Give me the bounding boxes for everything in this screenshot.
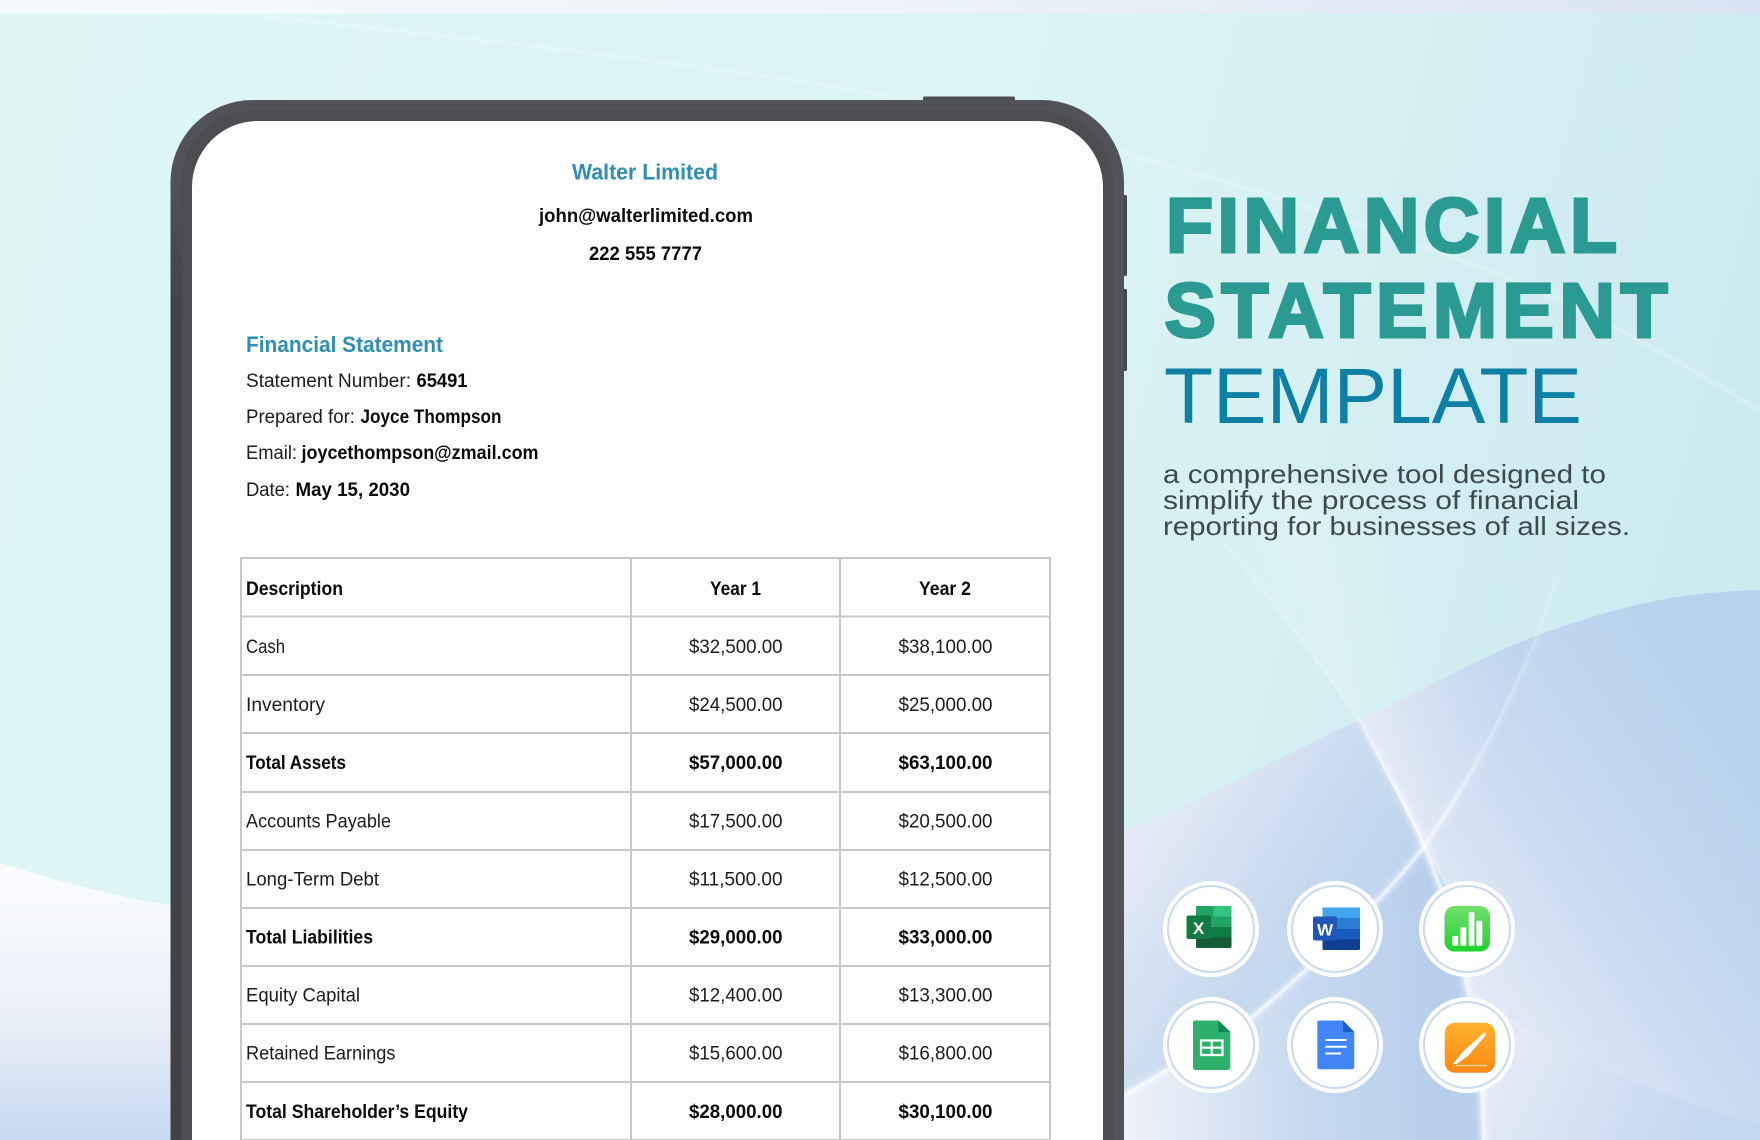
icon: microsoft excel bbox=[1163, 881, 1259, 977]
row: total assets: $57,000.00 bbox=[689, 753, 782, 774]
row: total liabilities: $29,000.00 bbox=[689, 928, 782, 948]
statement details: Joyce Thompson bbox=[360, 407, 502, 428]
row: long-term debt bbox=[246, 870, 992, 890]
company header bbox=[538, 160, 753, 265]
description text bbox=[1163, 459, 1630, 541]
row: total liabilities bbox=[246, 928, 992, 948]
row: inventory: $24,500.00 bbox=[689, 695, 782, 716]
row: cash: $32,500.00 bbox=[689, 637, 782, 658]
statement details: Statement Number: bbox=[246, 371, 411, 392]
row: total shareholder's equity bbox=[246, 1102, 992, 1123]
row: accounts payable bbox=[246, 812, 992, 832]
icon: microsoft word: W bbox=[1317, 920, 1334, 940]
tablet device frame bbox=[170, 96, 1127, 1140]
row: inventory: $25,000.00 bbox=[898, 695, 992, 716]
title bbox=[1164, 183, 1668, 440]
row: inventory: Inventory bbox=[246, 695, 326, 716]
table header row: Year 1 bbox=[710, 579, 761, 600]
table header row: Description bbox=[246, 579, 343, 600]
statement details: 65491 bbox=[416, 371, 468, 392]
statement details bbox=[246, 332, 538, 501]
row: total liabilities: Total Liabilities bbox=[246, 928, 373, 948]
row: total shareholder's equity: Total Shareholder’s Equity bbox=[246, 1102, 468, 1123]
company header: john@walterlimited.com bbox=[538, 206, 753, 227]
row: equity capital: $13,300.00 bbox=[898, 986, 992, 1006]
statement details: Date: bbox=[246, 480, 290, 501]
row: retained earnings bbox=[246, 1044, 992, 1064]
description text: a comprehensive tool designed to bbox=[1163, 459, 1606, 489]
row: total assets: $63,100.00 bbox=[898, 753, 992, 774]
row: retained earnings: $15,600.00 bbox=[689, 1044, 782, 1064]
statement details: Email: bbox=[246, 443, 297, 464]
row: accounts payable: $17,500.00 bbox=[689, 812, 782, 832]
row: equity capital: $12,400.00 bbox=[689, 986, 782, 1006]
statement details: Financial Statement bbox=[246, 332, 443, 357]
row: total shareholder's equity: $30,100.00 bbox=[898, 1102, 992, 1123]
statement details: joycethompson@zmail.com bbox=[301, 443, 538, 464]
table header row bbox=[246, 579, 971, 600]
title: FINANCIAL bbox=[1166, 183, 1617, 269]
row: long-term debt: $12,500.00 bbox=[898, 870, 992, 890]
description text: simplify the process of financial bbox=[1163, 485, 1579, 515]
row: retained earnings: $16,800.00 bbox=[898, 1044, 992, 1064]
row: accounts payable: Accounts Payable bbox=[246, 812, 391, 832]
icon: microsoft word bbox=[1287, 881, 1383, 977]
row: total liabilities: $33,000.00 bbox=[898, 928, 992, 948]
row: long-term debt: $11,500.00 bbox=[689, 870, 782, 890]
row: total shareholder's equity: $28,000.00 bbox=[689, 1102, 782, 1123]
row: total assets bbox=[246, 753, 992, 774]
row: cash bbox=[246, 637, 992, 658]
row: cash: Cash bbox=[246, 637, 285, 658]
statement details: May 15, 2030 bbox=[296, 480, 410, 501]
tablet screen: document page bbox=[192, 121, 1103, 1140]
title: TEMPLATE bbox=[1164, 351, 1582, 440]
description text: reporting for businesses of all sizes. bbox=[1163, 511, 1630, 541]
financial table bbox=[240, 558, 1051, 1140]
company header: 222 555 7777 bbox=[589, 244, 702, 265]
row: retained earnings: Retained Earnings bbox=[246, 1044, 396, 1064]
row: cash: $38,100.00 bbox=[898, 637, 992, 658]
icon: apple numbers bbox=[1419, 881, 1515, 977]
icon: apple pages bbox=[1419, 997, 1515, 1093]
row: equity capital: Equity Capital bbox=[246, 986, 360, 1006]
row: total assets: Total Assets bbox=[246, 753, 346, 774]
company header: Walter Limited bbox=[572, 160, 718, 184]
row: long-term debt: Long-Term Debt bbox=[246, 870, 380, 890]
title: STATEMENT bbox=[1164, 268, 1668, 354]
statement details: Prepared for: bbox=[246, 407, 355, 428]
table header row: Year 2 bbox=[919, 579, 971, 600]
icon: microsoft excel: X bbox=[1193, 919, 1205, 938]
row: accounts payable: $20,500.00 bbox=[898, 812, 992, 832]
icon: google sheets bbox=[1163, 997, 1259, 1093]
row: equity capital bbox=[246, 986, 992, 1006]
icon: google docs bbox=[1287, 997, 1383, 1093]
row: inventory bbox=[246, 695, 992, 716]
